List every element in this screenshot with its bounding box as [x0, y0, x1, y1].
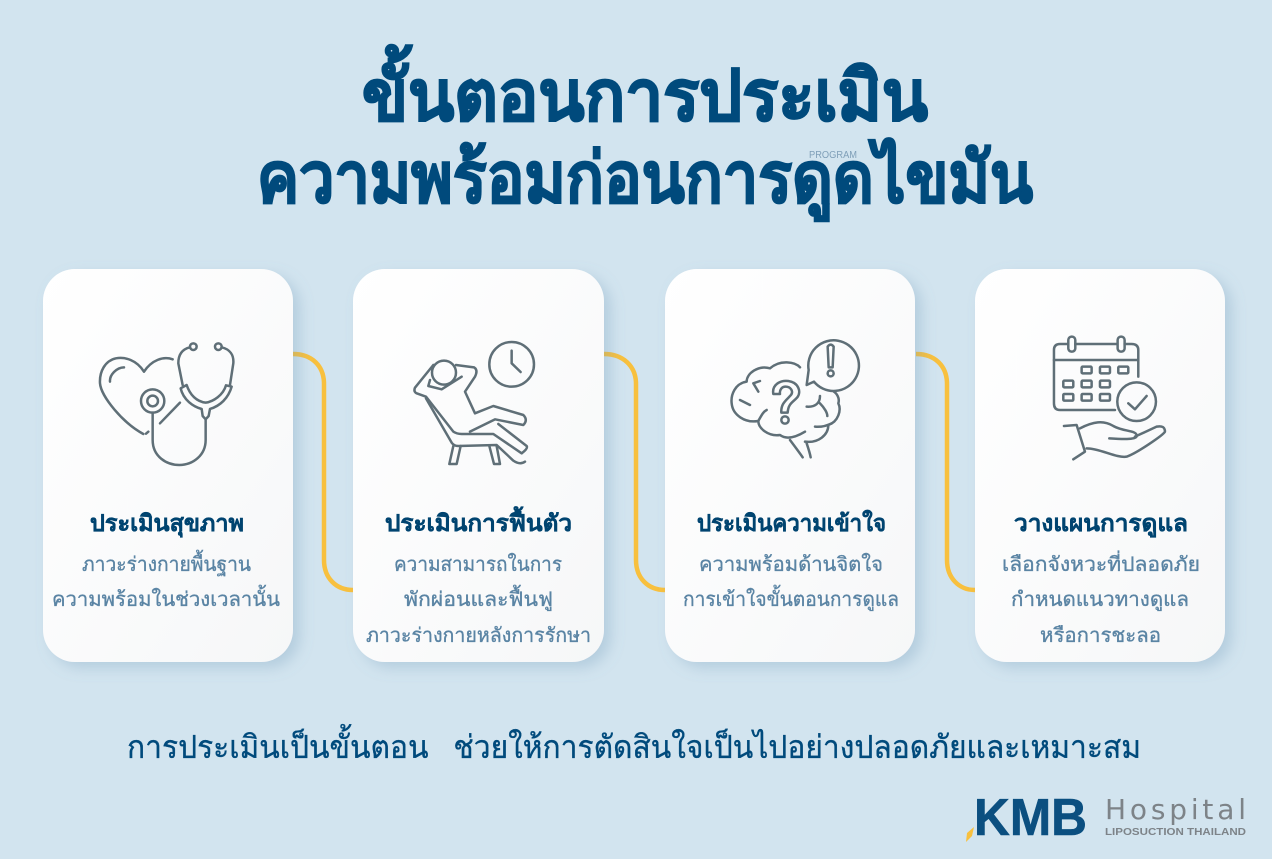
- description: เลือกจังหวะที่ปลอดภัย: [1002, 550, 1200, 576]
- title: ขั้นตอนการประเมิน: [362, 44, 928, 135]
- description: พักผ่อนและฟื้นฟู: [404, 585, 553, 612]
- icon: yellow spark: [966, 827, 974, 842]
- heading: ประเมินความเข้าใจ: [697, 509, 886, 536]
- description: [366, 553, 591, 647]
- panel: recovery assessment: [353, 269, 604, 662]
- logo: KMB Hospital: Hospital: [1105, 793, 1246, 826]
- icon: calendar with check over hand: [1054, 337, 1165, 459]
- description: กำหนดแนวทางดูแล: [1011, 589, 1189, 612]
- description: ความสามารถในการ: [394, 553, 562, 576]
- description: ภาวะร่างกายพื้นฐาน: [82, 550, 251, 576]
- logo: KMB Hospital: KMB: [974, 789, 1087, 847]
- title: ความพร้อมก่อนการดูดไขมัน: [257, 137, 1033, 222]
- description: [683, 553, 899, 612]
- connector: step 1 to 2: [293, 354, 353, 590]
- description: หรือการชะลอ: [1040, 625, 1161, 647]
- description: ภาวะร่างกายหลังการรักษา: [366, 625, 591, 647]
- heading: ประเมินการฟื้นตัว: [385, 506, 572, 536]
- description: การเข้าใจขั้นตอนการดูแล: [683, 585, 899, 612]
- description: [52, 550, 280, 611]
- logo: KMB Hospital: [966, 789, 1246, 847]
- panel: care planning: [975, 269, 1225, 662]
- summary statement: การประเมินเป็นขั้นตอน ช่วยให้การตัดสินใจเป็นไปอย่างปลอดภัยและเหมาะสม: [127, 724, 1141, 765]
- connector: step 3 to 4: [916, 354, 975, 590]
- small label: program: PROGRAM: [809, 150, 857, 161]
- heading: วางแผนการดูแล: [1014, 510, 1188, 538]
- icon: reclining person and clock: [414, 342, 534, 464]
- icon: heart and stethoscope: [100, 343, 233, 465]
- panel: health assessment: [43, 269, 293, 662]
- heading: ประเมินสุขภาพ: [90, 510, 244, 538]
- icon: brain with question and exclamation: [732, 340, 859, 457]
- description: ความพร้อมด้านจิตใจ: [699, 553, 883, 576]
- connector: step 2 to 3: [604, 354, 665, 590]
- title: [257, 44, 1033, 222]
- description: [1002, 550, 1200, 647]
- logo: KMB Hospital: LIPOSUCTION THAILAND: [1105, 826, 1246, 838]
- description: ความพร้อมในช่วงเวลานั้น: [52, 585, 280, 611]
- panel: understanding assessment: [665, 269, 915, 662]
